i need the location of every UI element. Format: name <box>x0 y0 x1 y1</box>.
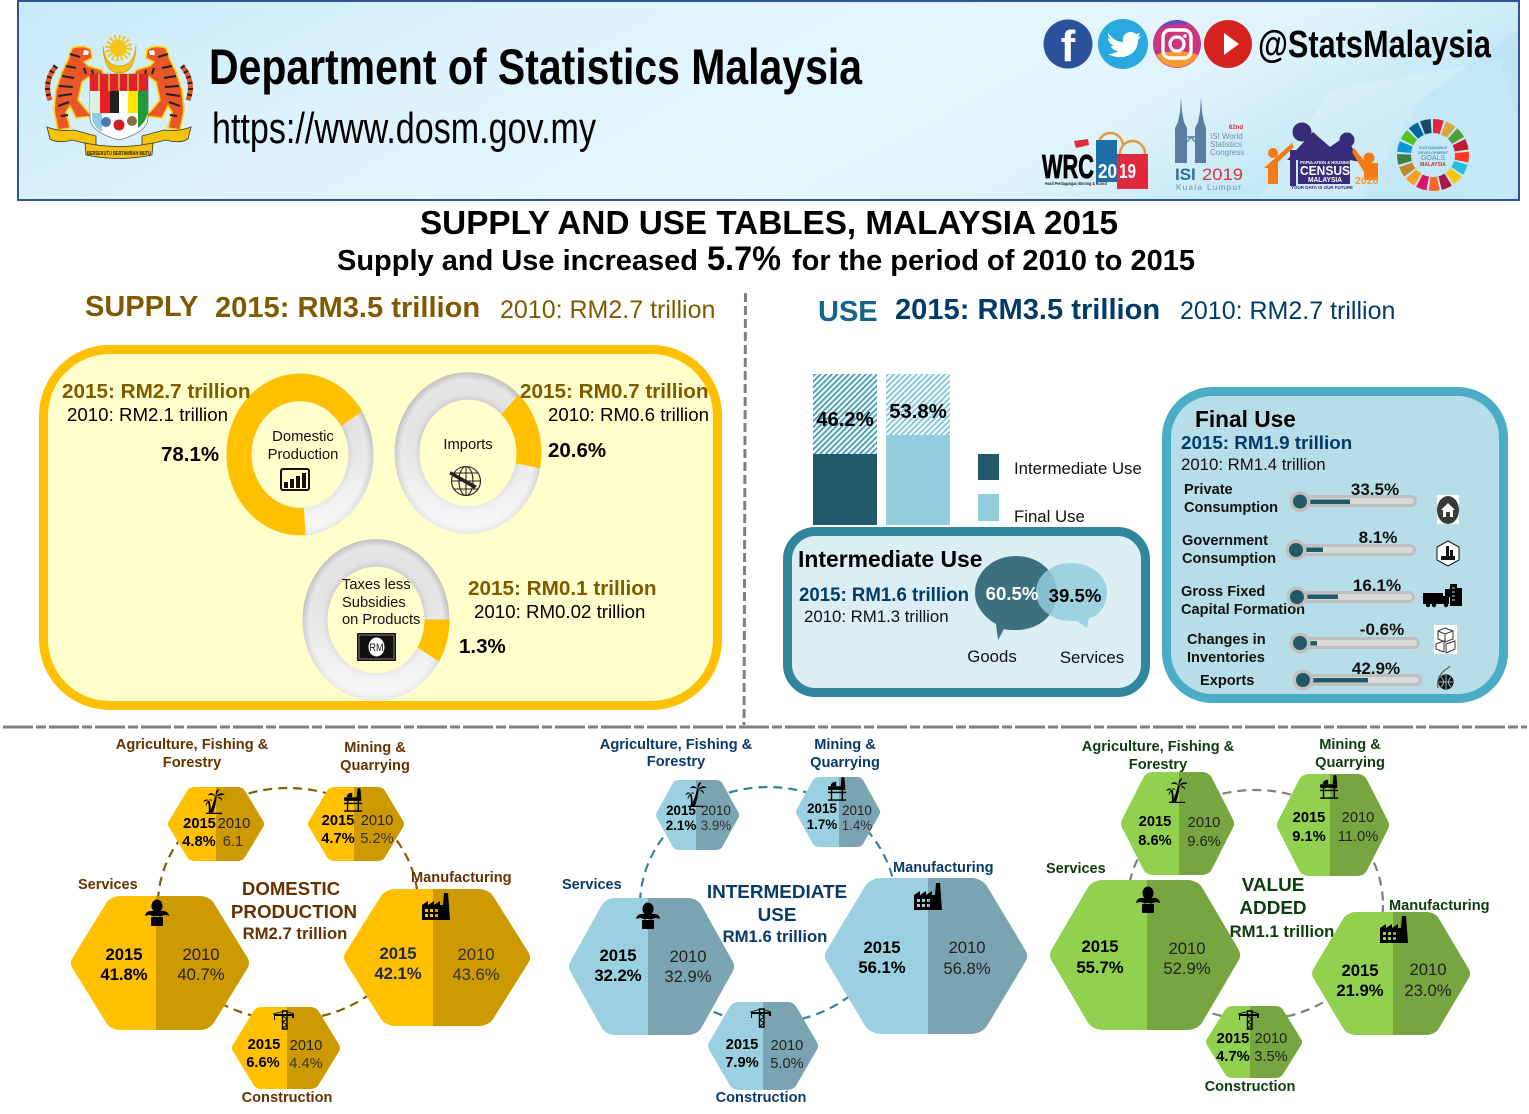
domestic production label: Domestic <box>272 429 334 445</box>
logo: census 2020: POPULATION & HOUSING <box>1300 160 1350 166</box>
taxes values <box>459 577 657 658</box>
hexagon: value added construction: 2010 <box>1255 1031 1287 1047</box>
icon: globe with plane <box>450 466 480 496</box>
logo: sustainable development goals wheel: GOALS <box>1421 155 1445 162</box>
sector labels: value added: Forestry <box>1129 757 1188 773</box>
use heading: 2015: RM3.5 trillion <box>895 294 1160 326</box>
sector labels: value added: Quarrying <box>1315 755 1385 771</box>
hexagon: value added agriculture: 9.6% <box>1187 834 1221 850</box>
sector labels: domestic production: Forestry <box>163 755 222 771</box>
row: gross fixed capital formation: Gross Fixed <box>1181 584 1265 600</box>
hexagon: domestic agriculture: 2010 <box>218 816 250 832</box>
logo: sustainable development goals wheel: SUSTAINABLE <box>1419 145 1447 150</box>
hexagon: intermediate manufacturing: 56.1% <box>858 958 906 977</box>
speech bubble: goods <box>975 556 1057 640</box>
header banner <box>18 1 1519 200</box>
hexagon: domestic services: 40.7% <box>177 965 225 984</box>
logo: ISI 2019: Congress <box>1210 148 1244 157</box>
panel: final use: 2015: RM1.9 trillion <box>1181 432 1352 453</box>
icon: house <box>1437 495 1459 524</box>
row: changes in inventories <box>1187 620 1420 666</box>
hexagon: value added construction: 2015 <box>1217 1031 1249 1047</box>
sector labels: domestic production: Quarrying <box>340 758 410 774</box>
sector labels: intermediate use: Construction <box>716 1090 806 1106</box>
hexagon: domestic manufacturing <box>361 893 513 1014</box>
header title: Department of Statistics Malaysia <box>209 39 863 95</box>
sector labels: value added: Services <box>1046 861 1106 877</box>
legend: Intermediate Use <box>1014 459 1142 478</box>
hexagon: intermediate manufacturing <box>843 883 1009 1020</box>
hexagon: domestic mining: 2015 <box>322 813 354 829</box>
hexagon: domestic services <box>87 900 233 1018</box>
icon: ringgit note <box>357 633 396 661</box>
hexagon: domestic agriculture: 2015 <box>183 816 216 832</box>
logo: sustainable development goals wheel: MALAYSIA <box>1420 162 1446 168</box>
hexagon: domestic construction: 2015 <box>248 1037 280 1053</box>
legend <box>978 454 1142 526</box>
sector labels: domestic production: Agriculture, Fishing & <box>116 737 269 753</box>
donut: taxes less subsidies <box>315 553 437 687</box>
heading: intermediate use <box>707 882 847 946</box>
supply heading: SUPPLY <box>85 291 198 323</box>
logo: WRC 2019: WRC <box>1042 148 1094 185</box>
sector labels: domestic production: Mining & <box>344 740 406 756</box>
icon: Malaysian coat of arms: BERSEKUTU BERTAMBAH MUTU <box>87 151 151 157</box>
row: changes in inventories: Inventories <box>1187 650 1265 666</box>
bubble labels <box>967 647 1124 667</box>
row: gross fixed capital formation: 16.1% <box>1353 576 1401 595</box>
logo: census 2020: CENSUS <box>1300 163 1350 178</box>
taxes label <box>342 577 420 628</box>
domestic production values <box>62 380 251 466</box>
hexagon: value added mining: 2015 <box>1293 810 1325 826</box>
supply heading: 2010: RM2.7 trillion <box>500 296 715 324</box>
hexagon: value added manufacturing: 2015 <box>1341 961 1379 980</box>
hexagon: intermediate agriculture <box>663 782 732 844</box>
hexagon: domestic agriculture <box>177 789 255 854</box>
hexagon: value added manufacturing: 23.0% <box>1404 981 1452 1000</box>
icon: export globe <box>1438 666 1453 689</box>
stacked bars: use split: 53.8% <box>889 401 947 423</box>
hexagon: domestic mining: 4.7% <box>321 831 355 847</box>
taxes label: on Products <box>342 612 420 628</box>
stacked bars: use split <box>813 374 950 525</box>
hexagon: value added manufacturing: 21.9% <box>1336 981 1384 1000</box>
icon: instagram <box>1153 20 1201 68</box>
subtitle <box>337 240 1195 278</box>
sector labels: intermediate use: Manufacturing <box>893 860 994 876</box>
subtitle: 5.7% <box>707 240 781 278</box>
hexagon: intermediate construction: 2015 <box>726 1037 758 1053</box>
logo: ISI 2019: ISI <box>1175 165 1196 184</box>
hexagon: domestic construction: 2010 <box>290 1038 322 1054</box>
icon: rising bar chart <box>281 469 309 490</box>
domestic production values: 2010: RM2.1 trillion <box>67 404 228 425</box>
heading: value added: ADDED <box>1239 898 1307 919</box>
row: exports: Exports <box>1200 673 1254 689</box>
hexagon: domestic services: 41.8% <box>100 965 148 984</box>
sector labels: value added <box>1046 737 1490 1095</box>
supply heading <box>85 291 715 324</box>
hexagon: domestic services: 2010 <box>182 945 220 964</box>
sector labels: intermediate use: Services <box>562 877 622 893</box>
row: exports <box>1200 659 1422 690</box>
hexagon: domestic manufacturing: 42.1% <box>374 964 422 983</box>
sector labels: domestic production: Manufacturing <box>411 870 512 886</box>
main title: SUPPLY AND USE TABLES, MALAYSIA 2015 <box>420 205 1118 242</box>
sector labels: domestic production: Construction <box>242 1090 332 1106</box>
imports label: Imports <box>443 437 493 453</box>
logo: census 2020 <box>1264 122 1379 190</box>
subtitle: for the period of 2010 to 2015 <box>792 245 1195 277</box>
sector labels: value added: Manufacturing <box>1389 898 1490 914</box>
panel: intermediate use: 2015: RM1.6 trillion <box>799 585 969 606</box>
panel: supply <box>44 350 718 706</box>
ring: intermediate use <box>640 787 896 1023</box>
hexagon: intermediate agriculture: 3.9% <box>701 818 731 833</box>
supply heading: 2015: RM3.5 trillion <box>215 292 480 324</box>
donut: domestic production <box>235 383 365 526</box>
logo: census 2020: 2020 <box>1355 175 1379 187</box>
row: private consumption <box>1184 480 1417 516</box>
sector labels: value added: Agriculture, Fishing & <box>1082 739 1235 755</box>
bubble labels: Goods <box>967 647 1017 666</box>
row: gross fixed capital formation <box>1181 576 1415 618</box>
sector labels: intermediate use: Forestry <box>647 754 706 770</box>
hexagon: domestic manufacturing: 2010 <box>457 945 495 964</box>
hexagon: domestic agriculture: 6.1 <box>223 834 243 850</box>
hexagon: intermediate mining: 1.7% <box>807 817 837 832</box>
panel: final use <box>1166 392 1504 698</box>
hexagon: intermediate services: 32.9% <box>664 967 712 986</box>
hexagon: value added mining: 9.1% <box>1292 829 1326 845</box>
icon: youtube <box>1204 20 1252 68</box>
header url: https://www.dosm.gov.my <box>212 104 596 153</box>
hexagon: intermediate services: 2015 <box>599 946 637 965</box>
hexagon: value added agriculture <box>1131 778 1224 866</box>
domestic production values: 2015: RM2.7 trillion <box>62 380 251 403</box>
hexagon: value added services: 2010 <box>1168 939 1206 958</box>
panel: intermediate use <box>788 532 1146 692</box>
row: government consumption: 8.1% <box>1359 528 1397 547</box>
logo: WRC 2019: Hasil Perdagangan Borong & Runcit <box>1045 181 1107 186</box>
logo: census 2020: YOUR DATA IS OUR FUTURE <box>1291 185 1353 190</box>
hexagon: value added construction: 3.5% <box>1254 1049 1288 1065</box>
sector labels: intermediate use: Quarrying <box>810 755 880 771</box>
icon: facebook <box>1044 20 1092 71</box>
imports values: 2010: RM0.6 trillion <box>548 404 709 425</box>
logo: census 2020: MALAYSIA <box>1308 177 1342 184</box>
hexagon: value added mining <box>1287 775 1379 867</box>
row: exports: 42.9% <box>1352 659 1400 678</box>
hexagon: domestic construction: 6.6% <box>246 1055 280 1071</box>
hexagon: intermediate manufacturing: 2015 <box>863 938 901 957</box>
domestic production label <box>268 429 338 463</box>
hexagon: value added mining: 2010 <box>1342 810 1374 826</box>
ring: value added <box>1127 790 1383 1020</box>
hexagon: intermediate construction: 5.0% <box>770 1056 804 1072</box>
logo: ISI 2019: Statistics <box>1210 140 1242 149</box>
icon: truck and buildings <box>1423 584 1462 607</box>
icon: stacked boxes <box>1434 625 1457 654</box>
icon: facebook: f <box>1061 22 1076 71</box>
logo: sustainable development goals wheel <box>1404 126 1462 184</box>
heading: intermediate use: INTERMEDIATE <box>707 882 847 903</box>
hexagon: value added agriculture: 8.6% <box>1138 833 1172 849</box>
domestic production values: 78.1% <box>161 443 219 466</box>
hexagon: intermediate agriculture: 2015 <box>666 803 696 818</box>
hexagon: value added manufacturing <box>1326 916 1456 1024</box>
heading: domestic production: RM2.7 trillion <box>243 924 347 943</box>
icon: Malaysian coat of arms <box>47 37 191 158</box>
hexagon: value added manufacturing: 2010 <box>1409 960 1447 979</box>
hexagon: intermediate manufacturing: 56.8% <box>943 959 991 978</box>
hexagon: domestic mining <box>317 788 395 854</box>
heading: value added <box>1230 875 1334 941</box>
hexagon: domestic manufacturing: 2015 <box>379 944 417 963</box>
stacked bars: use split: 46.2% <box>816 409 874 431</box>
hexagon: intermediate mining: 2015 <box>807 801 837 816</box>
logo: ISI 2019: 2019 <box>1202 165 1243 184</box>
taxes label: Taxes less <box>342 577 411 593</box>
hexagon: intermediate construction: 7.9% <box>725 1055 759 1071</box>
domestic production label: Production <box>268 447 338 463</box>
taxes values: 2015: RM0.1 trillion <box>468 577 657 600</box>
hexagon: intermediate mining <box>804 777 872 841</box>
legend: Final Use <box>1014 507 1085 526</box>
hexagon: value added services <box>1067 886 1223 1016</box>
panel: intermediate use: 2010: RM1.3 trillion <box>804 607 949 626</box>
hexagon: value added services: 52.9% <box>1163 959 1211 978</box>
hexagon: domestic mining: 5.2% <box>360 831 394 847</box>
heading: domestic production: DOMESTIC <box>242 878 340 899</box>
row: private consumption: 33.5% <box>1351 480 1399 499</box>
logo: WRC 2019 <box>1042 133 1148 189</box>
hexagon: intermediate services <box>584 902 719 1023</box>
donut: imports <box>382 358 554 548</box>
hexagon: intermediate services: 32.2% <box>594 966 642 985</box>
hexagon: value added agriculture: 2010 <box>1188 815 1220 831</box>
bubble values <box>986 583 1102 606</box>
heading: value added: VALUE <box>1242 875 1304 896</box>
sector labels: intermediate use: Agriculture, Fishing & <box>600 737 753 753</box>
ring: domestic production <box>158 788 418 1020</box>
row: government consumption: Consumption <box>1182 551 1276 567</box>
icon: twitter <box>1098 19 1148 69</box>
logo: ISI 2019: Kuala Lumpur <box>1176 183 1241 192</box>
taxes values: 2010: RM0.02 trillion <box>474 601 645 622</box>
heading: intermediate use: USE <box>758 905 796 926</box>
hexagon: domestic agriculture: 4.8% <box>182 834 216 850</box>
use heading: 2010: RM2.7 trillion <box>1180 297 1395 325</box>
hexagon: value added construction <box>1215 1011 1293 1072</box>
imports values: 20.6% <box>548 439 606 462</box>
hexagon: domestic construction: 4.4% <box>289 1056 323 1072</box>
subtitle: Supply and Use increased <box>337 245 698 277</box>
hexagon: value added construction: 4.7% <box>1216 1049 1250 1065</box>
hexagon: domestic mining: 2010 <box>361 813 393 829</box>
hexagon: intermediate services: 2010 <box>669 947 707 966</box>
hexagon: value added mining: 11.0% <box>1338 829 1378 845</box>
hexagon: intermediate mining: 2010 <box>842 803 872 818</box>
heading: domestic production: PRODUCTION <box>231 901 357 922</box>
sector labels: domestic production <box>78 737 512 1106</box>
sector labels: intermediate use <box>562 737 994 1106</box>
hexagon: domestic construction <box>242 1011 330 1082</box>
heading: domestic production <box>231 878 357 943</box>
bubble values: 60.5% <box>986 583 1039 604</box>
row: government consumption <box>1182 528 1416 567</box>
hexagon: value added services: 55.7% <box>1076 958 1124 977</box>
hexagon: intermediate construction <box>718 1009 808 1082</box>
speech bubble: services <box>1036 563 1107 628</box>
hexagon: value added agriculture: 2015 <box>1139 814 1171 830</box>
heading: value added: RM1.1 trillion <box>1230 922 1334 941</box>
logo: ISI 2019: 62nd <box>1229 125 1243 131</box>
hexagon: intermediate construction: 2010 <box>771 1038 803 1054</box>
icon: government building <box>1437 541 1459 566</box>
imports values <box>520 380 709 462</box>
hexagon: intermediate manufacturing: 2010 <box>948 938 986 957</box>
use heading <box>818 294 1395 328</box>
panel: final use: 2010: RM1.4 trillion <box>1181 455 1326 474</box>
row: changes in inventories: Changes in <box>1187 632 1266 648</box>
logo: WRC 2019: 19 <box>1119 161 1136 183</box>
logo: sustainable development goals wheel: DEVELOPMENT <box>1418 150 1449 155</box>
icon: ringgit note: RM <box>370 642 384 654</box>
panel: final use: Final Use <box>1195 406 1296 432</box>
logo: ISI 2019 <box>1175 97 1244 192</box>
imports values: 2015: RM0.7 trillion <box>520 380 709 403</box>
row: changes in inventories: -0.6% <box>1360 620 1404 639</box>
sector labels: intermediate use: Mining & <box>814 737 876 753</box>
taxes label: Subsidies <box>342 595 406 611</box>
hexagon: intermediate agriculture: 2.1% <box>666 818 696 833</box>
row: private consumption: Consumption <box>1184 500 1278 516</box>
hexagon: domestic manufacturing: 43.6% <box>452 965 500 984</box>
sector labels: domestic production: Services <box>78 877 138 893</box>
logo: ISI 2019: ISI World <box>1210 132 1243 141</box>
hexagon: intermediate mining: 1.4% <box>842 818 872 833</box>
bubble values: 39.5% <box>1049 585 1102 606</box>
hexagon: value added services: 2015 <box>1081 937 1119 956</box>
taxes values: 1.3% <box>459 635 506 658</box>
hexagon: domestic services: 2015 <box>105 945 143 964</box>
sector labels: value added: Construction <box>1205 1079 1295 1095</box>
row: government consumption: Government <box>1182 533 1268 549</box>
hexagon: intermediate agriculture: 2010 <box>701 803 731 818</box>
row: private consumption: Private <box>1184 482 1233 498</box>
sector labels: value added: Mining & <box>1319 737 1381 753</box>
logo: WRC 2019: 20 <box>1098 161 1117 183</box>
heading: intermediate use: RM1.6 trillion <box>723 927 827 946</box>
panel: intermediate use: Intermediate Use <box>798 546 982 572</box>
bubble labels: Services <box>1060 648 1124 667</box>
row: gross fixed capital formation: Capital Formation <box>1181 602 1305 618</box>
use heading: USE <box>818 296 878 328</box>
